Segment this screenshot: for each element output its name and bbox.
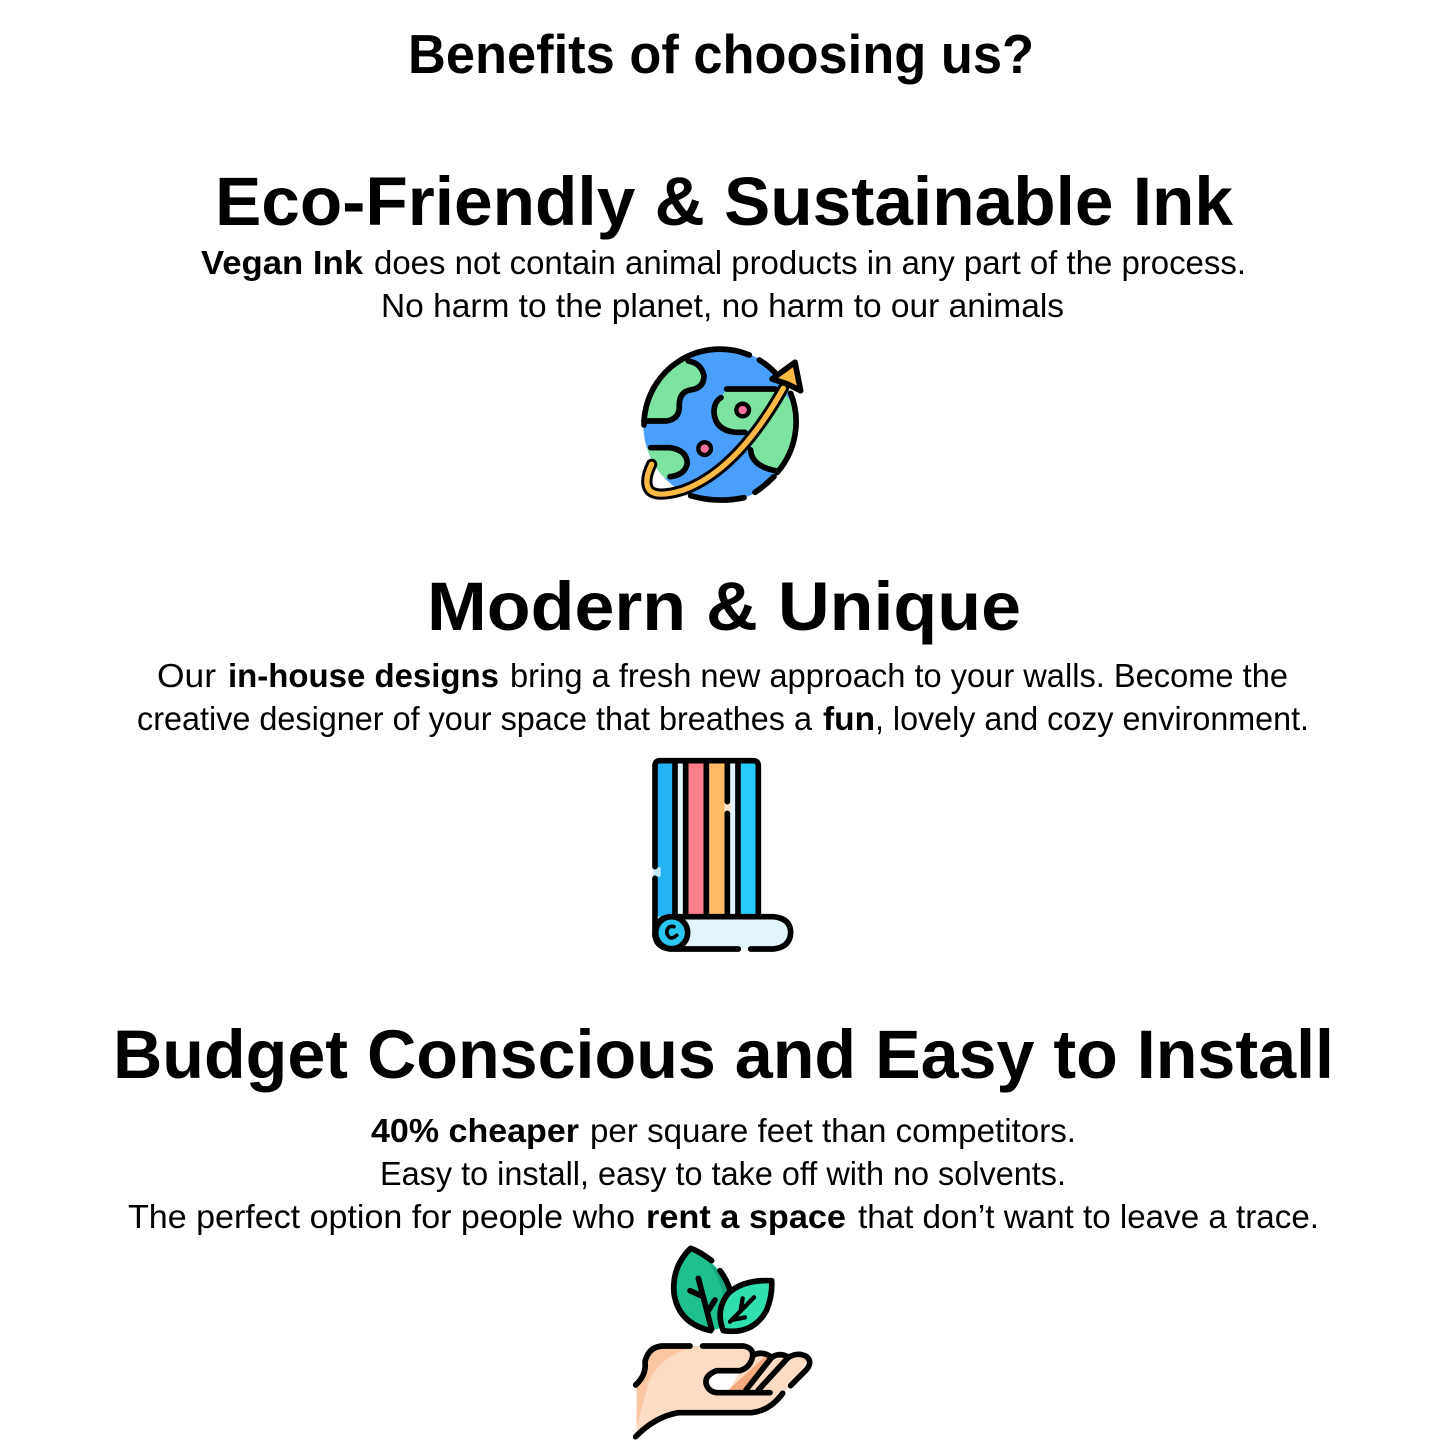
text block: in-house designs: bring a fresh new approach to your walls. Become the (510, 657, 1288, 694)
icon: globe with arrow (633, 348, 807, 502)
text block: pricing and install: Easy to install, easy to take off with no solvents. (380, 1155, 1066, 1192)
panel: budget conscious (113, 1016, 1334, 1437)
text block: vegan ink: No harm to the planet, no harm to our animals (381, 287, 1064, 324)
text block: in-house designs: fun (823, 700, 875, 737)
text block: vegan ink (201, 244, 1246, 324)
heading: modern and unique: Modern & Unique (427, 568, 1021, 645)
text block: pricing and install (128, 1112, 1319, 1235)
text block: vegan ink: Vegan Ink (201, 244, 364, 281)
text block: pricing and install: 40% cheaper (371, 1112, 579, 1149)
text block: pricing and install: that don’t want to leave a trace. (858, 1198, 1319, 1235)
icon: hand holding leaves (636, 1248, 810, 1437)
heading: eco-friendly: Eco-Friendly & Sustainable Ink (215, 163, 1234, 240)
text block: in-house designs: in-house designs (228, 657, 499, 694)
text block: in-house designs: , lovely and cozy environment. (875, 700, 1309, 737)
text block: in-house designs (137, 657, 1309, 737)
title: Benefits of choosing us? (408, 23, 1034, 85)
text block: pricing and install: rent a space (646, 1198, 846, 1235)
panel: eco-friendly ink (201, 163, 1246, 502)
text block: pricing and install: per square feet than competitors. (590, 1112, 1076, 1149)
text block: vegan ink: does not contain animal products in any part of the process. (374, 244, 1246, 281)
panel: modern and unique (137, 568, 1309, 949)
heading: budget conscious: Budget Conscious and Easy to Install (113, 1016, 1334, 1093)
text block: in-house designs: creative designer of your space that breathes a (137, 700, 813, 737)
icon: wallpaper roll (653, 761, 791, 949)
text block: in-house designs: Our (157, 657, 216, 694)
text block: pricing and install: The perfect option for people who (128, 1198, 635, 1235)
